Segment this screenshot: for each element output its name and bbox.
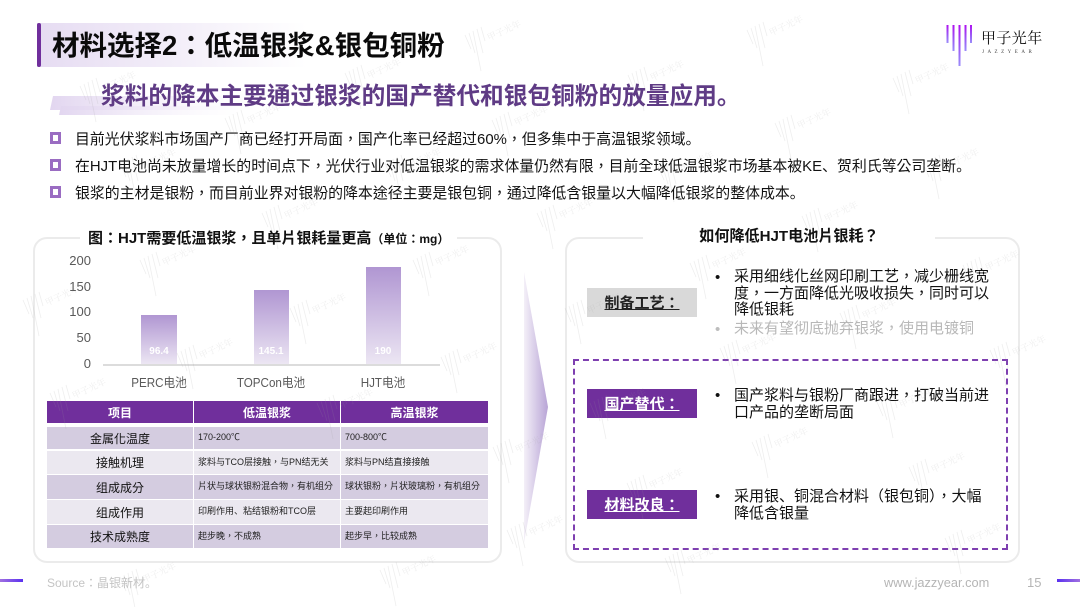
y axis labels: 0 [84, 356, 91, 371]
watermarks: 甲子光年 [897, 384, 935, 411]
watermarks: 甲子光年 [1010, 332, 1048, 359]
label: domestic substitution [587, 389, 697, 418]
bar PERC [141, 315, 177, 364]
dashed highlight box [573, 359, 1008, 550]
watermarks: 甲子光年 [943, 145, 981, 172]
source note: Source：晶银新材。 [47, 576, 157, 590]
row 5 low temperature [194, 525, 340, 548]
watermarks: 甲子光年 [767, 12, 805, 39]
process text: 度，一方面降低光吸收损失，同时可以 [734, 284, 989, 302]
watermarks: 甲子光年 [70, 375, 108, 402]
footer left accent [0, 579, 23, 582]
watermarks: 甲子光年 [678, 148, 716, 175]
point 1 text: 目前光伏浆料市场国产厂商已经打开局面，国产化率已经超过60%，但多集中于高温银浆领域。 [75, 132, 700, 148]
future bullet marker: • [715, 321, 720, 338]
watermarks: 甲子光年 [740, 330, 778, 357]
watermarks: 甲子光年 [772, 424, 810, 451]
substitution bullet marker: • [715, 387, 720, 404]
point 3 marker [50, 186, 61, 198]
watermarks: 甲子光年 [282, 195, 320, 222]
y axis labels: 50 [77, 330, 91, 345]
row 3 low temperature [194, 475, 340, 499]
watermarks: 甲子光年 [860, 295, 898, 322]
watermarks: 甲子光年 [610, 385, 648, 412]
watermarks: 甲子光年 [337, 385, 375, 412]
key points [50, 131, 971, 202]
row 1 label [47, 427, 193, 449]
label: preparation process: 制备工艺： [604, 295, 680, 312]
panel: how to reduce silver consumption [565, 237, 1020, 563]
row 4 low temperature: 印刷作用、粘结银粉和TCO层 [198, 506, 316, 516]
row 4 high temperature [341, 500, 488, 524]
watermarks: 甲子光年 [513, 429, 551, 456]
row 3 high temperature: 球状银粉，片状玻璃粉，有机组分 [345, 481, 480, 491]
watermarks: 甲子光年 [929, 449, 967, 476]
row 3 high temperature [341, 475, 488, 499]
row 3 label: 组成成分 [96, 480, 144, 494]
header: high temperature paste: 高温银浆 [390, 406, 438, 420]
subtitle text: 浆料的降本主要通过银浆的国产替代和银包铜粉的放量应用。 [101, 84, 741, 110]
point 2 marker [50, 159, 61, 171]
row 4 low temperature [194, 500, 340, 524]
header: low temperature paste: 低温银浆 [243, 406, 291, 420]
category label HJT: HJT电池 [361, 376, 405, 390]
page number: 15 [1027, 575, 1041, 590]
watermarks: 甲子光年 [647, 465, 685, 492]
row 3 label [47, 475, 193, 499]
title accent bar [37, 23, 41, 67]
watermarks: 甲子光年 [43, 282, 81, 309]
row 1 label: 金属化温度 [90, 432, 150, 446]
watermarks: 甲子光年 [100, 68, 138, 95]
substitution text [734, 387, 989, 420]
logo name: 甲子光年 [981, 27, 1043, 48]
bar TOPCon [254, 290, 289, 364]
header: low temperature paste [194, 401, 340, 423]
row 2 label [47, 451, 193, 474]
footer right accent [1057, 579, 1080, 582]
substitution text: 国产浆料与银粉厂商跟进，打破当前进 [734, 387, 989, 404]
watermarks: 甲子光年 [913, 60, 951, 87]
value label TOPCon: 145.1 [258, 346, 284, 357]
process text: 采用细线化丝网印刷工艺，减少栅线宽 [734, 268, 989, 285]
axis line [103, 364, 440, 366]
row 5 high temperature: 起步早，比较成熟 [345, 530, 417, 540]
substitution text: 口产品的垄断局面 [734, 404, 854, 420]
header: item: 项目 [108, 406, 132, 420]
watermarks: 甲子光年 [245, 100, 283, 127]
watermarks: 甲子光年 [585, 290, 623, 317]
watermarks: 甲子光年 [485, 17, 523, 44]
ribbon [50, 96, 210, 115]
watermarks: 甲子光年 [648, 57, 686, 84]
watermarks: 甲子光年 [461, 339, 499, 366]
process text: 降低银耗 [734, 301, 794, 318]
title bar [37, 23, 445, 67]
row 5 label: 技术成熟度 [90, 530, 150, 544]
row 5 low temperature: 起步晚，不成熟 [198, 530, 261, 540]
y axis labels [69, 253, 91, 371]
subtitle with ribbon [50, 83, 741, 115]
watermarks: 甲子光年 [512, 102, 550, 129]
y axis labels: 200 [69, 253, 91, 268]
bar HJT [366, 267, 401, 364]
value label HJT: 190 [375, 346, 391, 357]
point 3 text: 银浆的主材是银粉，而目前业界对银粉的降本途径主要是银包铜，通过降低含银量以大幅降低银浆的整体成本。 [75, 186, 805, 202]
watermarks: 甲子光年 [140, 559, 178, 586]
point 1 marker [50, 132, 61, 144]
label: preparation process [587, 288, 697, 317]
process bullet marker: • [715, 269, 720, 286]
header: item [47, 401, 193, 423]
row 2 high temperature [341, 451, 488, 474]
row 2 label: 接触机理 [96, 456, 144, 470]
row 4 label [47, 500, 193, 524]
watermarks: 甲子光年 [710, 245, 748, 272]
row 2 high temperature: 浆料与PN结直接接触 [345, 456, 430, 466]
watermarks: 甲子光年 [433, 242, 471, 269]
watermarks: 甲子光年 [140, 145, 178, 172]
row 1 high temperature [341, 427, 488, 449]
row 2 low temperature [194, 451, 340, 474]
process text [734, 268, 989, 318]
logo [946, 25, 1043, 66]
panel: silver consumption chart and table [33, 237, 502, 563]
row 4 high temperature: 主要起印刷作用 [345, 506, 408, 516]
watermarks: 甲子光年 [822, 198, 860, 225]
y axis labels: 150 [69, 279, 91, 294]
category label PERC: PERC电池 [131, 376, 187, 390]
y axis labels: 100 [69, 304, 91, 319]
label: domestic substitution: 国产替代： [604, 396, 680, 413]
website: www.jazzyear.com [884, 575, 989, 590]
watermarks: 甲子光年 [160, 242, 198, 269]
watermarks: 甲子光年 [965, 520, 1003, 547]
watermarks: 甲子光年 [310, 290, 348, 317]
category label TOPCon: TOPCon电池 [237, 376, 305, 390]
row 1 high temperature: 700-800℃ [345, 432, 387, 442]
title text: 材料选择2：低温银浆&银包铜粉 [52, 30, 445, 61]
row 3 low temperature: 片状与球状银粉混合物，有机组分 [198, 481, 333, 491]
improvement text: 降低含银量 [734, 504, 809, 522]
logo mark [946, 25, 972, 66]
watermarks: 甲子光年 [405, 145, 443, 172]
label: material improvement [587, 490, 697, 519]
row 1 low temperature: 170-200℃ [198, 432, 240, 442]
label: material improvement: 材料改良： [604, 497, 680, 514]
watermarks: 甲子光年 [795, 105, 833, 132]
value label PERC: 96.4 [149, 346, 169, 357]
improvement text [734, 488, 982, 522]
watermarks: 甲子光年 [527, 512, 565, 539]
panel heading: 如何降低HJT电池片银耗？ [699, 228, 879, 245]
chart title: 图：HJT需要低温银浆，且单片银耗量更高（单位：mg） [88, 230, 449, 247]
row 5 high temperature [341, 525, 488, 548]
row 2 low temperature: 浆料与TCO层接触，与PN结无关 [198, 456, 329, 466]
row 1 low temperature [194, 427, 340, 449]
watermarks: 甲子光年 [197, 335, 235, 362]
watermarks: 甲子光年 [365, 55, 403, 82]
improvement bullet marker: • [715, 488, 720, 505]
watermarks: 甲子光年 [400, 552, 438, 579]
header: high temperature paste [341, 401, 488, 423]
arrow [524, 274, 548, 542]
row 5 label [47, 525, 193, 548]
watermarks: 甲子光年 [983, 247, 1021, 274]
title background gradient [37, 23, 307, 67]
panel heading [643, 227, 935, 247]
watermarks: 甲子光年 [685, 540, 723, 567]
bar chart [69, 253, 440, 371]
logo english name: JAZZYEAR [982, 50, 1035, 55]
improvement text: 采用银、铜混合材料（银包铜），大幅 [734, 488, 982, 505]
row 4 label: 组成作用 [96, 506, 144, 520]
point 2 text: 在HJT电池尚未放量增长的时间点下，光伏行业对低温银浆的需求体量仍然有限，目前全球低温银浆市场基本被KE、贺利氏等公司垄断。 [75, 159, 971, 175]
watermarks: 甲子光年 [557, 195, 595, 222]
future text: 未来有望彻底抛弃银浆，使用电镀铜 [734, 320, 974, 337]
table header [47, 401, 488, 423]
